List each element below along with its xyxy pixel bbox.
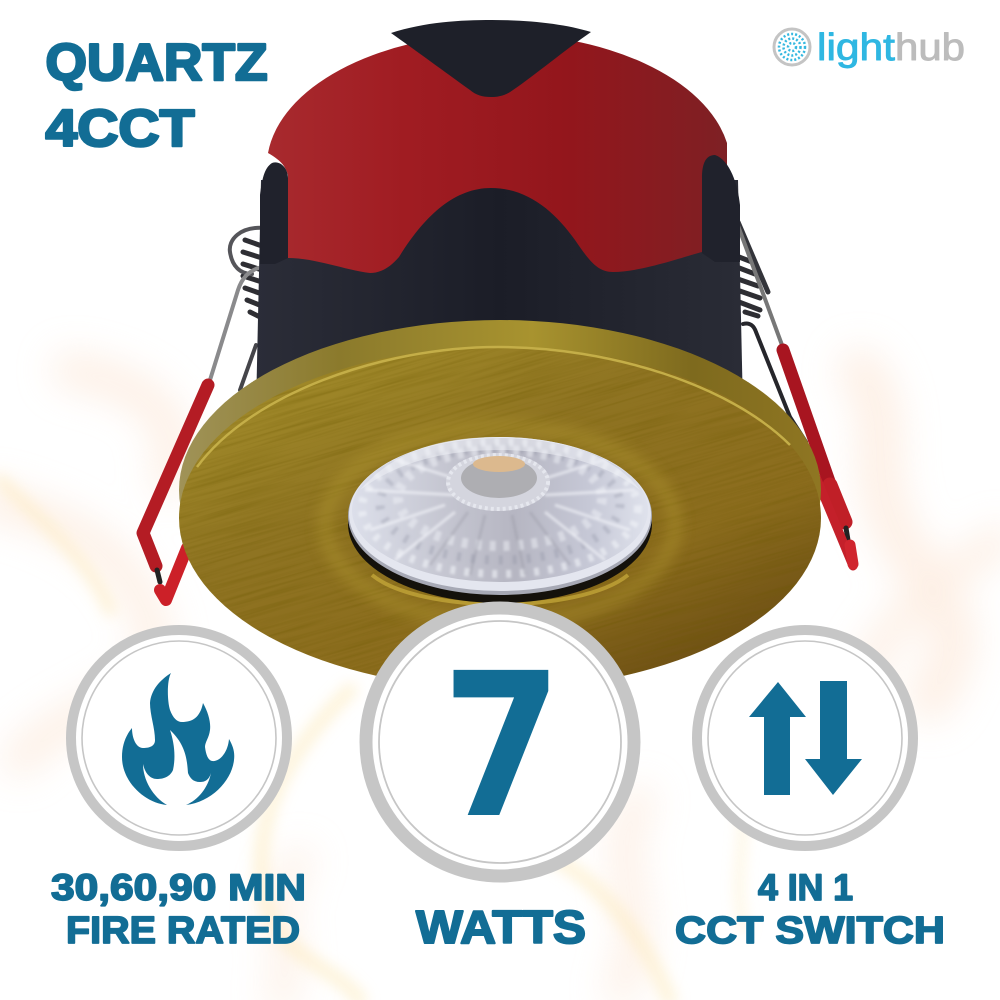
label: fire rated: FIRE RATED	[66, 910, 300, 952]
product: downlight	[136, 20, 858, 676]
title: 4CCT	[46, 100, 195, 158]
badge: fire rated	[71, 630, 287, 846]
label: watts: WATTS	[416, 901, 586, 953]
label: fire rated: 30,60,90 MIN	[51, 867, 306, 908]
dark tabs	[260, 155, 740, 264]
icon: flame	[122, 673, 234, 805]
background flames	[0, 370, 1000, 1000]
logo: lighthub: light	[817, 27, 895, 69]
icon: up and down arrows	[749, 681, 862, 795]
red cap	[268, 34, 727, 273]
numeral 7: 7	[442, 630, 562, 862]
lens	[348, 437, 652, 603]
logo: lighthub	[774, 27, 965, 69]
spring clip: right	[734, 222, 853, 566]
title	[46, 34, 268, 158]
label: fire rated	[51, 867, 306, 952]
spring clip: left	[143, 228, 265, 600]
label: cct switch: CCT SWITCH	[675, 910, 945, 952]
dark top notch	[391, 20, 591, 97]
badge: 7 watts	[366, 608, 634, 876]
dark body	[256, 180, 743, 410]
logo: lighthub: hub	[895, 27, 965, 69]
title: QUARTZ	[46, 34, 268, 92]
lens hub	[446, 453, 550, 511]
bezel ring	[179, 320, 821, 676]
label: cct switch: 4 IN 1	[758, 867, 853, 908]
label: cct switch	[675, 867, 945, 952]
badge: cct switch	[697, 630, 913, 846]
